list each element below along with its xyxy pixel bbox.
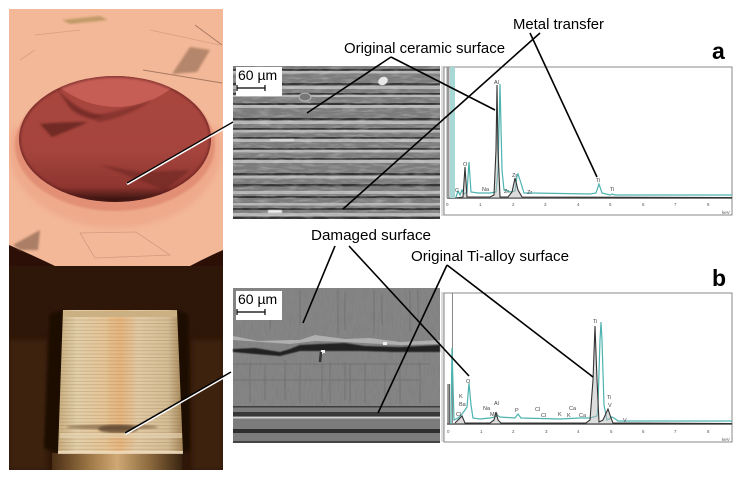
energy axis ticks: 0 [446,202,449,207]
peak labels: Cl [456,412,461,418]
EDS spectrum a [441,66,732,216]
energy axis ticks: 8 [707,202,710,207]
energy axis ticks: 6 [642,429,645,434]
peak labels: Cl [541,413,546,419]
callout line: stem to micrograph b [125,372,231,434]
scale bar: 60 micrometres: 60 µm [238,67,277,83]
energy axis ticks: 2 [512,429,515,434]
heading: metal transfer: Metal transfer [513,17,604,33]
peak labels: Al [494,401,499,407]
scale bar: 60 micrometres: 60 µm [238,291,277,307]
peak labels: K [558,412,562,418]
peak labels: V [623,418,627,424]
EDS spectrum b [441,292,732,442]
micrograph: Ti-alloy surface [233,288,440,443]
arrows: metal transfer [343,33,597,209]
heading: damaged surface: Damaged surface [311,228,431,244]
peak labels: Ti [610,187,614,193]
callout line: socket to micrograph a [127,122,233,184]
energy axis ticks: 7 [674,202,677,207]
energy axis ticks: 3 [544,202,547,207]
energy axis ticks: 1 [479,202,482,207]
arrows: original ceramic surface [307,57,495,113]
peak labels: Ca [579,413,587,419]
arrows: original Ti-alloy surface [378,265,593,413]
photo: ceramic liner socket [9,9,223,266]
peak labels: Zr [527,190,532,196]
energy axis ticks: keV [722,210,730,215]
teal spectrum trace [451,322,732,424]
peak labels: Na [482,187,490,193]
black spectrum trace [456,85,732,198]
peak labels: K [459,394,463,400]
energy axis ticks: 0 [447,429,450,434]
peak labels [456,319,627,424]
energy axis ticks: 3 [545,429,548,434]
energy axis ticks: 4 [577,202,580,207]
energy axis ticks: 6 [642,202,645,207]
arrows: damaged surface [303,246,469,376]
peak labels: O [466,379,471,385]
energy axis ticks: 5 [609,202,612,207]
peak labels: Ti [593,319,597,325]
peak labels: Zr [512,173,517,179]
energy axis ticks: 7 [674,429,677,434]
peak labels: P [515,408,519,414]
peak labels: Ti [607,395,611,401]
scale bar: 60 micrometres [236,67,282,96]
heading: original Ti-alloy surface: Original Ti-alloy surface [411,249,569,265]
peak labels: Na [483,406,491,412]
energy axis ticks: 2 [512,202,515,207]
energy axis ticks: 1 [480,429,483,434]
black spectrum trace [455,326,732,424]
peak labels: Mg [490,412,498,418]
energy axis ticks [446,202,730,215]
peak labels: Ca [569,406,577,412]
energy axis ticks [447,429,730,442]
energy axis ticks: 8 [707,429,710,434]
scale bar: 60 micrometres [236,291,282,320]
peak labels: V [608,403,612,409]
photo: titanium alloy stem [9,266,223,470]
energy axis ticks: keV [722,437,730,442]
micrograph: ceramic surface [233,66,440,219]
peak labels: Ba [459,402,467,408]
teal spectrum trace [456,84,732,197]
panel label a: a [712,38,725,64]
peak labels: Ti [596,178,600,184]
energy axis ticks: 4 [577,429,580,434]
heading: original ceramic surface: Original ceramic surface [344,41,505,57]
peak labels: O [463,162,468,168]
peak labels: Zr [504,189,509,195]
peak labels: C [455,188,459,194]
peak labels: K [567,413,571,419]
panel label b: b [712,265,726,291]
peak labels: Al [494,80,499,86]
energy axis ticks: 5 [610,429,613,434]
surface scratches [233,290,430,403]
peak labels: Cl [535,407,540,413]
peak labels [455,80,614,196]
